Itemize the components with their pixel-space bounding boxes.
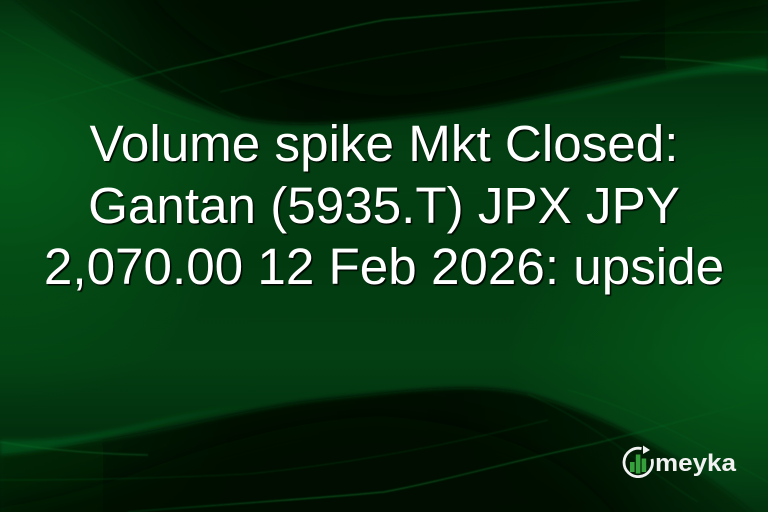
logo: meyka bbox=[622, 446, 737, 478]
title: Volume spike Mkt Closed: bbox=[90, 115, 678, 172]
title bbox=[44, 115, 724, 296]
title: 2,070.00 12 Feb 2026: upside bbox=[44, 238, 724, 295]
icon: ring with bar chart bbox=[624, 446, 652, 477]
wordmark: meyka bbox=[655, 450, 737, 477]
title: Gantan (5935.T) JPX JPY bbox=[88, 176, 680, 234]
